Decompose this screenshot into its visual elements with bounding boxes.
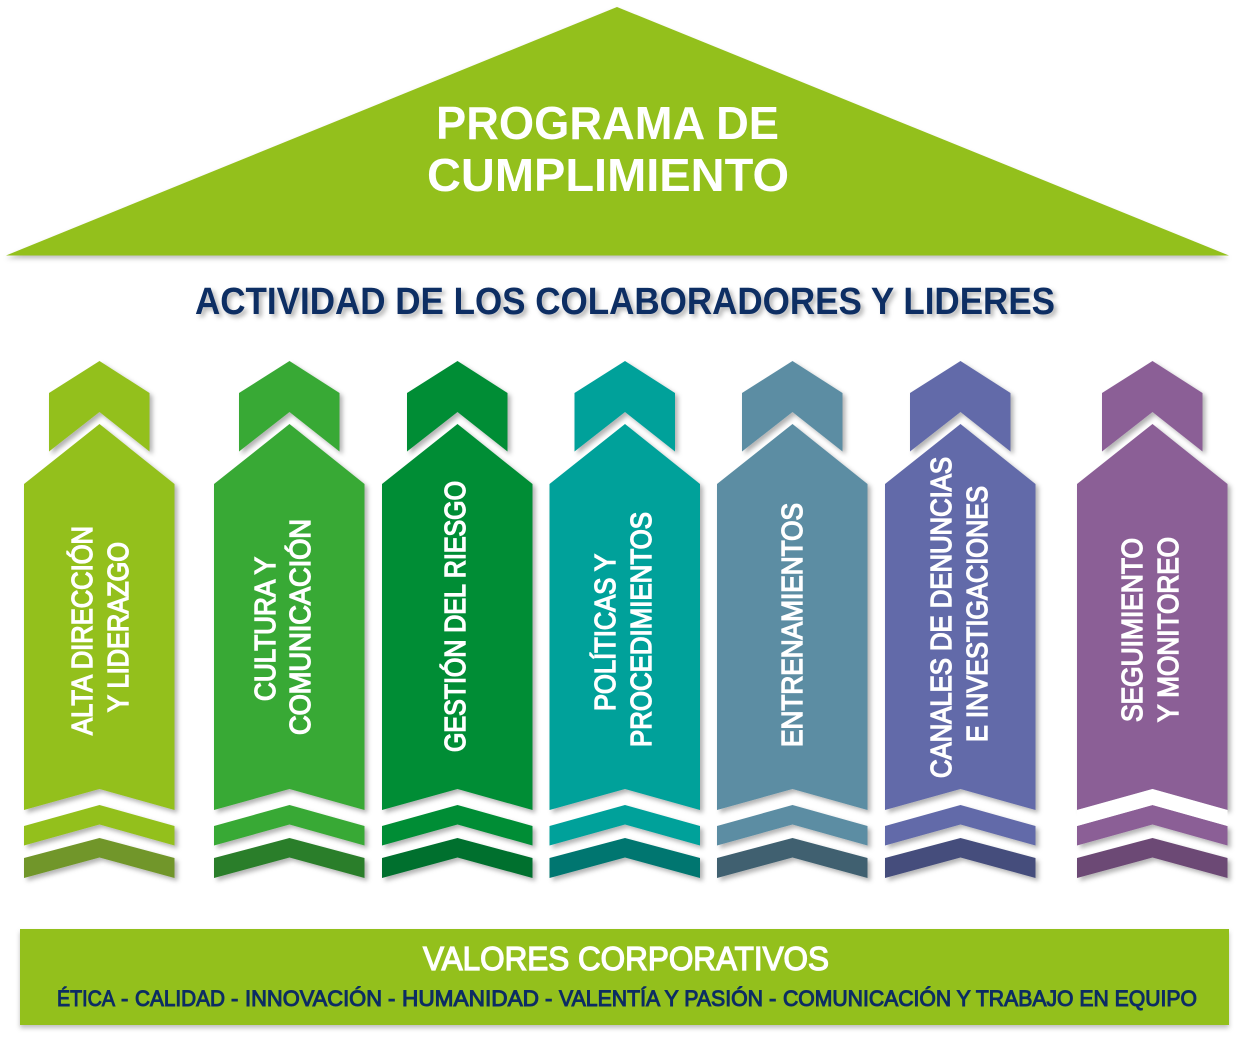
lower chevron: [214, 805, 364, 846]
label: entrenamientos: ENTRENAMIENTOS: [777, 503, 809, 747]
main arrow: [717, 424, 868, 810]
values list: HUMANIDAD: [402, 986, 539, 1011]
label: seguimiento y monitoreo: [1117, 537, 1185, 722]
label: cultura y comunicación: COMUNICACIÓN: [285, 519, 317, 735]
values list: COMUNICACIÓN Y TRABAJO EN EQUIPO: [783, 986, 1197, 1011]
pillar: políticas y procedimientos: [550, 361, 700, 878]
pillar: seguimiento y monitoreo: [1077, 361, 1228, 878]
label: canales de denuncias e investigaciones: [926, 457, 994, 778]
main arrow: [1077, 424, 1228, 810]
values list: -: [769, 986, 776, 1011]
lower chevron: [717, 805, 868, 846]
title: PROGRAMA DE: [436, 97, 779, 149]
roof: programa de cumplimiento: [6, 7, 1229, 256]
main arrow: [550, 424, 700, 810]
panel: valores corporativos: [20, 929, 1229, 1025]
lower chevron: [885, 805, 1036, 846]
base chevron: [382, 838, 532, 878]
top chevron: [239, 361, 340, 452]
label: canales de denuncias e investigaciones: E INVESTIGACIONES: [962, 486, 994, 742]
values list: -: [545, 986, 552, 1011]
pillar: cultura y comunicación: [214, 361, 364, 878]
label: alta dirección y liderazgo: ALTA DIRECCIÓN: [67, 526, 99, 735]
heading: actividad de los colaboradores y lideres: ACTIVIDAD DE LOS COLABORADORES Y LIDERES: [195, 281, 1055, 323]
panel heading: VALORES CORPORATIVOS: [423, 940, 829, 977]
values list: [57, 986, 1197, 1011]
label: políticas y procedimientos: PROCEDIMIENTOS: [626, 512, 658, 747]
base chevron: [24, 838, 174, 878]
values list: ÉTICA: [57, 986, 115, 1011]
main arrow: [214, 424, 364, 810]
top chevron: [574, 361, 675, 452]
values list: VALENTÍA Y PASIÓN: [559, 986, 763, 1011]
base chevron: [885, 838, 1036, 878]
white band: [1077, 789, 1228, 826]
label: cultura y comunicación: [250, 519, 317, 735]
lower chevron: [24, 805, 174, 846]
pillar: alta dirección y liderazgo: [24, 361, 174, 878]
top chevron: [910, 361, 1010, 452]
main arrow: [382, 424, 532, 810]
main arrow: [24, 424, 174, 810]
lower chevron: [550, 805, 700, 846]
base chevron: [550, 838, 700, 878]
values list: -: [121, 986, 128, 1011]
roof: programa de cumplimiento: CUMPLIMIENTO: [427, 149, 789, 201]
label: alta dirección y liderazgo: Y LIDERAZGO: [103, 542, 135, 712]
top chevron: [407, 361, 508, 452]
base chevron: [717, 838, 868, 878]
main arrow: [885, 424, 1036, 810]
top chevron: [49, 361, 150, 452]
label: seguimiento y monitoreo: Y MONITOREO: [1153, 537, 1185, 722]
label: seguimiento y monitoreo: SEGUIMIENTO: [1117, 538, 1149, 722]
lower chevron: [382, 805, 532, 846]
label: políticas y procedimientos: POLÍTICAS Y: [590, 554, 622, 711]
label: políticas y procedimientos: [590, 512, 658, 747]
pillar: entrenamientos: [717, 361, 868, 878]
label: gestión del riesgo: GESTIÓN DEL RIESGO: [440, 481, 472, 752]
values list: INNOVACIÓN: [245, 986, 382, 1011]
top chevron: [1102, 361, 1202, 452]
values list: CALIDAD: [135, 986, 225, 1011]
base chevron: [1077, 838, 1228, 878]
pillar: canales de denuncias e investigaciones: [885, 361, 1036, 878]
label: alta dirección y liderazgo: [67, 526, 135, 735]
values list: -: [388, 986, 395, 1011]
label: canales de denuncias e investigaciones: CANALES DE DENUNCIAS: [926, 457, 958, 778]
base chevron: [214, 838, 364, 878]
pillar: gestión del riesgo: [382, 361, 532, 878]
top chevron: [742, 361, 842, 452]
values list: -: [231, 986, 238, 1011]
label: cultura y comunicación: CULTURA Y: [250, 557, 282, 701]
lower chevron: [1077, 805, 1228, 846]
